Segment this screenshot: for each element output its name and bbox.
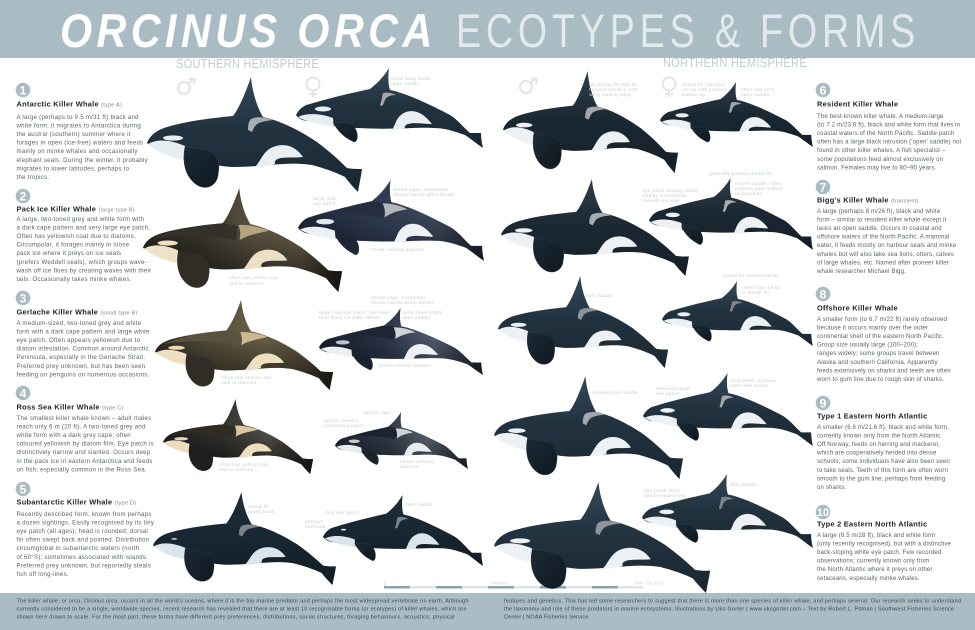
annotation labels on whales: forward-slanted, with: [589, 87, 638, 93]
footer text right: the taxonomy and role of these predators in marine ecosystems. Illustrations by Uko Gorter | www.ukogorter.com – Text by Robert L. Pitman | Southwest Fisheries Science: [504, 606, 954, 612]
footer text right: features and genetics. This has led some researchers to suggest that there is more than one species of killer whale, and perhaps several. Our research seeks to understand: [504, 598, 961, 604]
panel: 6 Resident Killer Whale: some populations feed almost exclusively on: [817, 156, 943, 163]
whale: Bigg's female: [649, 178, 813, 250]
annotation labels on whales: tiny eye patch: [326, 510, 359, 516]
panel: 5 Subantarctic Killer Whale: a dozen sightings. Easily recognised by its tiny: [16, 520, 155, 527]
panel: 4 Ross Sea Killer Whale: reach only 6 m (20 ft). A two-toned grey and: [16, 424, 146, 431]
panel: 8 Offshore Killer Whale: because it occurs mainly over the outer: [817, 325, 928, 332]
panel: 7 Bigg's Killer Whale: whales but will also take sea lions, otters, calves: [816, 251, 954, 258]
whale: Antarctic female: [296, 68, 483, 148]
footer text left: shown here drawn to scale. For the most part, these forms have different prey preferences, distributions, social structures, foraging behaviours, acoustics, physical: [16, 614, 454, 620]
panel: 3 Gerlache Killer Whale: Preferred prey unknown, but has been seen: [16, 363, 145, 370]
panel: 6 Resident Killer Whale: often has a large black intrusion ('open' saddle) not: [817, 139, 962, 146]
footer text right: Center | NOAA Fisheries Service.: [504, 614, 590, 620]
panel: 6 Resident Killer Whale: [816, 83, 962, 171]
whale: Antarctic male: [147, 77, 362, 192]
icon: female symbol north: [662, 78, 676, 97]
annotation labels on whales: often has yellow coat: [219, 462, 269, 468]
annotation labels on whales: slanted eye patch: [323, 423, 364, 429]
panel: 5 Subantarctic Killer Whale: of 60°S); sometimes associated with islands.: [16, 554, 148, 561]
annotation labels on whales: relatively large: [656, 386, 690, 392]
panel: 1 Antarctic Killer Whale: the tropics.: [16, 174, 49, 181]
panel: 5 Subantarctic Killer Whale: Preferred prey unknown, but reportedly steals: [16, 562, 151, 569]
panel: 6 Resident Killer Whale: (to 7.2 m/23.6 ft), black and white form that lives in: [817, 122, 960, 129]
panel: 8 Offshore Killer Whale: ranges widely; some groups travel between: [817, 350, 940, 357]
annotation labels on whales: generally pointed dorsal fin: [709, 171, 772, 177]
annotation labels on whales: some have slight: [391, 76, 431, 82]
panel: 8 Offshore Killer Whale: 8: [820, 287, 827, 301]
panel: 3 Gerlache Killer Whale: diatom infestation. Common around Antarctic: [16, 346, 149, 353]
annotation labels on whales: large oval eye patch; narrower: [319, 310, 390, 316]
annotation labels on whales: shown without: [400, 459, 434, 465]
panel: 4 Ross Sea Killer Whale: The smallest killer whale known – adult males: [16, 415, 151, 422]
panel: 9 Type 1 Eastern North Atlantic: currently known only from the North Atlantic.: [817, 433, 942, 440]
whale: Ross Sea female: [335, 412, 468, 469]
panel: 6 Resident Killer Whale: salmon. Females may live to 80–90 years.: [817, 164, 937, 171]
title: ECOTYPES & FORMS: [456, 5, 915, 58]
panel: 4 Ross Sea Killer Whale: on fish; especially common in the Ross Sea.: [16, 466, 147, 473]
annotation labels on whales: diatoms: [400, 464, 419, 470]
whale: Resident female: [660, 82, 813, 147]
panel: 8 Offshore Killer Whale: Group size usually large (100–200);: [817, 342, 918, 349]
panel: 4 Ross Sea Killer Whale: coloured yellowish by diatom film. Eye patch is: [16, 441, 154, 448]
panel: 10 Type 2 Eastern North Atlantic: back-sloping white eye patch. Few recorded: [817, 549, 941, 556]
annotation labels on whales: eye patch: [313, 201, 336, 207]
whale: Offshore female: [662, 281, 813, 346]
panel: 10 Type 2 Eastern North Atlantic: [816, 505, 952, 582]
panel: 1 Antarctic Killer Whale: the austral (southern) summer where it: [16, 131, 131, 138]
annotation labels on whales: forehead: [305, 524, 326, 530]
heading: northern hemisphere: NORTHERN HEMISPHERE: [663, 55, 807, 70]
panel: 2 Pack Ice Killer Whale: tails. Occasionally takes minke whales.: [16, 276, 132, 283]
annotation labels on whales: dorsal fin rounded: [682, 82, 724, 88]
panel: 2 Pack Ice Killer Whale: Pack Ice Killer Whale (large type B): [16, 204, 135, 214]
panel: 5 Subantarctic Killer Whale: fin often swept back and pointed. Distribution: [16, 537, 149, 544]
panel: 2 Pack Ice Killer Whale: (prefers Weddell seals), which groups wave-: [16, 259, 147, 266]
panel: 10 Type 2 Eastern North Atlantic: 10: [817, 507, 829, 519]
whale: Pack Ice male: [143, 188, 342, 292]
panel: 6 Resident Killer Whale: 6: [820, 83, 827, 97]
annotation labels on whales: dorsal cape; sometimes: [371, 295, 427, 301]
footer text left: The killer whale, or orca, Orcinus orca, occurs in all the world's oceans, where it is the top marine predator and perhaps the most widespread vertebrate on earth. Although: [16, 598, 469, 604]
annotation labels on whales: some have slight: [402, 310, 442, 316]
annotation labels on whales: faint saddle: [730, 482, 757, 488]
panel: 2 Pack Ice Killer Whale: [16, 189, 151, 283]
annotation labels on whales: shows narrow white border: [371, 300, 434, 306]
title: ORCINUS ORCA: [60, 6, 432, 58]
panel: 10 Type 2 Eastern North Atlantic: Type 2 Eastern North Atlantic: [817, 520, 928, 528]
panel: 4 Ross Sea Killer Whale: in the pack ice in eastern Antarctica and feeds: [16, 458, 153, 465]
whale: Type 2 male: [494, 482, 710, 593]
whale: Subantarctic male: [153, 492, 336, 585]
panel: 7 Bigg's Killer Whale: form – similar to resident killer whale except it: [817, 217, 946, 224]
panel: 4 Ross Sea Killer Whale: [16, 386, 154, 473]
annotation labels on whales: towards the rear: [642, 198, 680, 204]
annotation labels on whales: often has yellow coat: [222, 375, 272, 381]
whale: Bigg's male: [501, 179, 689, 276]
annotation labels on whales: often has yellow coat: [229, 275, 279, 281]
annotation labels on whales: dorsal fin rounded at tip: [723, 273, 778, 279]
panel: 1 Antarctic Killer Whale: white form; it migrates to Antarctica during: [16, 123, 141, 130]
panel: 10 Type 2 Eastern North Atlantic: (only recently recognised), but with a distinctive: [817, 541, 952, 548]
panel: 3 Gerlache Killer Whale: form with a dark cape pattern and large white: [16, 329, 150, 336]
panel: 8 Offshore Killer Whale: Offshore Killer Whale: [817, 304, 898, 312]
panel: 1 Antarctic Killer Whale: [16, 83, 149, 181]
annotation labels on whales: due to diatoms: [222, 380, 257, 386]
scale bar: metres: [492, 580, 508, 586]
panel: 9 Type 1 Eastern North Atlantic: A smaller (6.6 m/21.6 ft), black and white form,: [817, 424, 949, 431]
whale: Subantarctic female: [323, 495, 483, 566]
panel: 8 Offshore Killer Whale: continental shelf of the eastern North Pacific.: [817, 333, 944, 340]
footer text left: currently considered to be a single, worldwide species, recent research has revealed that there are at least 10 recognisable forms (or ecotypes) of killer whales, which are: [16, 606, 467, 612]
panel: 9 Type 1 Eastern North Atlantic: Off Norway, feeds on herring and mackerel,: [817, 441, 940, 448]
annotation labels on whales: than Pack Ice Killer Whale: [319, 315, 380, 321]
panel: 1 Antarctic Killer Whale: A large (perhaps to 9.5 m/31 ft) black and: [16, 114, 139, 121]
panel: 3 Gerlache Killer Whale: 3: [20, 291, 27, 305]
panel: 2 Pack Ice Killer Whale: wash off ice floes by creating waves with their: [16, 267, 151, 274]
panel: 9 Type 1 Eastern North Atlantic: [816, 396, 950, 491]
panel: 3 Gerlache Killer Whale: feeding on penguins on numerous occasions.: [16, 371, 150, 378]
panel: 1 Antarctic Killer Whale: elephant seals. During the winter, it probably: [16, 157, 149, 164]
annotation labels on whales: narrow forward-: [323, 418, 360, 424]
panel: 2 Pack Ice Killer Whale: a dark cape pattern and very large eye patch.: [16, 225, 150, 232]
annotation labels on whales: wide rake marks: [730, 383, 768, 389]
panel: 3 Gerlache Killer Whale: eye patch. Often appears yellowish due to: [16, 337, 141, 344]
whale: Gerlache female: [319, 308, 483, 375]
annotation labels on whales: dorsal cape: [364, 410, 391, 416]
panel: 6 Resident Killer Whale: Resident Killer Whale: [817, 100, 898, 108]
annotation labels on whales: swept back: [248, 509, 274, 515]
annotation labels on whales: trailing tip: [682, 92, 705, 98]
footer text left: [16, 598, 469, 620]
panel: 9 Type 1 Eastern North Atlantic: which are cooperatively herded into dense: [816, 450, 937, 457]
panel: 3 Gerlache Killer Whale: [16, 291, 150, 378]
panel: 6 Resident Killer Whale: coastal waters of the North Pacific. Saddle patch: [817, 130, 954, 137]
icon: female symbol south: [306, 78, 320, 97]
annotation labels on whales: faint saddle: [406, 502, 433, 508]
panel: 9 Type 1 Eastern North Atlantic: to take seals. Teeth of this form are often worn: [817, 467, 948, 474]
panel: 6 Resident Killer Whale: found in other killer whales. A fish specialist –: [817, 147, 946, 154]
panel: 1 Antarctic Killer Whale: migrates to lower latitudes, perhaps to: [16, 165, 130, 172]
annotation labels on whales: shown without diatoms: [378, 363, 431, 369]
panel: 9 Type 1 Eastern North Atlantic: smooth to the gum line, perhaps from feeding: [817, 475, 945, 482]
panel: 7 Bigg's Killer Whale: eater, it feeds mostly on harbour seals and minke: [817, 242, 957, 249]
whale: Type 1 male: [494, 376, 683, 479]
panel: 1 Antarctic Killer Whale: mainly on minke whales and occasionally: [16, 148, 138, 155]
annotation labels on whales: extends past midline: [735, 186, 783, 192]
annotation labels on whales: due to diatoms: [229, 281, 264, 287]
panel: 3 Gerlache Killer Whale: Peninsula, especially in the Gerlache Strait.: [16, 354, 145, 361]
annotation labels on whales: often have nicks: [742, 285, 780, 291]
panel: 8 Offshore Killer Whale: Alaska and southern California. Apparently: [817, 359, 938, 366]
annotation labels on whales: bulbous: [305, 519, 324, 525]
annotation labels on whales: dorsal cape; sometimes: [393, 187, 449, 193]
annotation labels on whales: open saddle: [402, 315, 431, 321]
panel: 2 Pack Ice Killer Whale: Often has yellowish coat due to diatoms.: [16, 233, 136, 240]
whale: Type 1 female: [643, 373, 813, 446]
panel: 8 Offshore Killer Whale: A smaller form (to 6.7 m/22 ft) rarely observed: [817, 316, 947, 323]
annotation labels on whales: slants toward rear: [644, 493, 686, 499]
panel: 4 Ross Sea Killer Whale: white form with a dark grey cape; often: [16, 432, 131, 439]
heading: southern hemisphere: SOUTHERN HEMISPHERE: [176, 56, 319, 71]
annotation labels on whales: conspicuous saddle: [592, 390, 638, 396]
annotation labels on whales: worn teeth; produce: [730, 378, 776, 384]
panel: 1 Antarctic Killer Whale: forages in open (ice-free) waters and feeds: [16, 140, 143, 147]
annotation labels on whales: [219, 76, 783, 530]
panel: 7 Bigg's Killer Whale: whale researcher Michael Bigg.: [816, 268, 906, 275]
panel: 4 Ross Sea Killer Whale: Ross Sea Killer Whale (type C): [16, 402, 124, 412]
whale: Pack Ice female: [298, 180, 484, 261]
panel: 7 Bigg's Killer Whale: 7: [820, 180, 827, 194]
header band: [0, 0, 975, 58]
panel: 9 Type 1 Eastern North Atlantic: on sharks.: [817, 484, 847, 491]
panel: 7 Bigg's Killer Whale: of large whales, etc. Named after pioneer killer: [817, 259, 949, 266]
panel: 2 Pack Ice Killer Whale: 2: [20, 189, 27, 203]
annotation labels on whales: eye patch often: [644, 488, 680, 494]
panel: 7 Bigg's Killer Whale: lacks an open saddle. Occurs in coastal and: [817, 225, 942, 232]
scale bar: 10m (32.8 ft): [634, 580, 664, 586]
panel: 8 Offshore Killer Whale: feeds extensively on sharks and teeth are often: [817, 367, 951, 374]
annotation labels on whales: shows narrow white border: [393, 192, 456, 198]
panel: 9 Type 1 Eastern North Atlantic: schools; some individuals have also been seen: [817, 458, 950, 465]
annotation labels on whales: of dorsal fin: [735, 191, 762, 197]
panel: 5 Subantarctic Killer Whale: Recently described form, known from perhaps: [16, 511, 152, 518]
panel: 10 Type 2 Eastern North Atlantic: the North Atlantic where it preys on other: [817, 566, 933, 573]
panel: 1 Antarctic Killer Whale: Antarctic Killer Whale (type A): [16, 100, 122, 108]
annotation labels on whales: tall dorsal fin may be: [589, 82, 637, 88]
panel: 2 Pack Ice Killer Whale: Circumpolar, it forages mainly in loose: [16, 242, 130, 249]
panel: 2 Pack Ice Killer Whale: A large, two-toned grey and white form with: [16, 216, 144, 223]
whale: Gerlache male: [155, 300, 333, 390]
annotation labels on whales: on top with pointed: [682, 87, 726, 93]
panel: 5 Subantarctic Killer Whale: fish off long-lines.: [16, 571, 69, 578]
footer text right: [504, 598, 961, 620]
whale: Type 2 female: [642, 474, 813, 548]
panel: 5 Subantarctic Killer Whale: Subantarctic Killer Whale (type D): [16, 498, 136, 506]
annotation labels on whales: dorsal fin: [248, 504, 270, 510]
panel: 3 Gerlache Killer Whale: Gerlache Killer Whale (small type B): [16, 308, 137, 316]
annotation labels on whales: shown without diatoms: [371, 247, 424, 253]
annotation labels on whales: often has very: [741, 87, 774, 93]
title: [60, 5, 915, 58]
annotation labels on whales: eye patch: [656, 391, 679, 397]
whale: Ross Sea male: [163, 399, 313, 474]
annotation labels on whales: slightly downwards: [642, 193, 686, 199]
panel: 5 Subantarctic Killer Whale: 5: [20, 482, 27, 496]
annotation labels on whales: eye patch usually slants: [642, 188, 698, 194]
whale: Resident male: [503, 71, 678, 173]
annotation labels on whales: due to diatoms: [219, 467, 254, 473]
panel: 4 Ross Sea Killer Whale: 4: [20, 386, 27, 400]
whale: Offshore male: [498, 276, 668, 368]
panel: 5 Subantarctic Killer Whale: eye patch (all ages); head is rounded; dorsal: [16, 528, 148, 535]
scale bar: [384, 580, 664, 588]
panel: 10 Type 2 Eastern North Atlantic: cetaceans, especially minke whales.: [817, 575, 920, 582]
footer band: [0, 593, 975, 630]
panel: 7 Bigg's Killer Whale: [816, 180, 957, 275]
annotation labels on whales: open saddle: [741, 92, 770, 98]
annotation labels on whales: wavy trailing edge: [589, 92, 631, 98]
panel: 1 Antarctic Killer Whale: 1: [20, 83, 27, 97]
panel: 2 Pack Ice Killer Whale: pack ice where it preys on ice seals: [16, 250, 121, 257]
panel: 3 Gerlache Killer Whale: A medium-sized, two-toned grey and white: [16, 320, 142, 327]
annotation labels on whales: closed saddle, often: [735, 181, 782, 187]
annotation labels on whales: in dorsal fin: [742, 290, 769, 296]
panel: 5 Subantarctic Killer Whale: circumglobal in subantarctic waters (north: [16, 545, 139, 552]
icon: male symbol north: [520, 78, 536, 93]
icon: male symbol south: [178, 79, 194, 94]
panel: 6 Resident Killer Whale: The best-known killer whale. A medium-large: [817, 113, 944, 120]
panel: 9 Type 1 Eastern North Atlantic: 9: [820, 396, 827, 410]
panel: 8 Offshore Killer Whale: [816, 287, 951, 383]
panel: 7 Bigg's Killer Whale: offshore waters of the North Pacific. A mammal: [817, 234, 950, 241]
panel: 5 Subantarctic Killer Whale: [16, 482, 155, 578]
panel: 10 Type 2 Eastern North Atlantic: A large (8.5 m/28 ft), black and white form: [817, 532, 935, 539]
panel: 10 Type 2 Eastern North Atlantic: observations; currently known only from: [817, 558, 929, 565]
panel: 9 Type 1 Eastern North Atlantic: Type 1 Eastern North Atlantic: [817, 412, 928, 420]
annotation labels on whales: faint saddle: [586, 293, 613, 299]
panel: 7 Bigg's Killer Whale: A large (perhaps 8 m/26 ft), black and white: [817, 208, 941, 215]
panel: 4 Ross Sea Killer Whale: distinctively narrow and slanted. Occurs deep: [16, 449, 151, 456]
panel: 8 Offshore Killer Whale: worn to gum line due to rough skin of sharks.: [816, 376, 944, 383]
annotation labels on whales: large oval: [313, 196, 336, 202]
panel: 7 Bigg's Killer Whale: Bigg's Killer Whale (transient): [817, 196, 918, 204]
annotation labels on whales: open saddle: [391, 81, 420, 87]
